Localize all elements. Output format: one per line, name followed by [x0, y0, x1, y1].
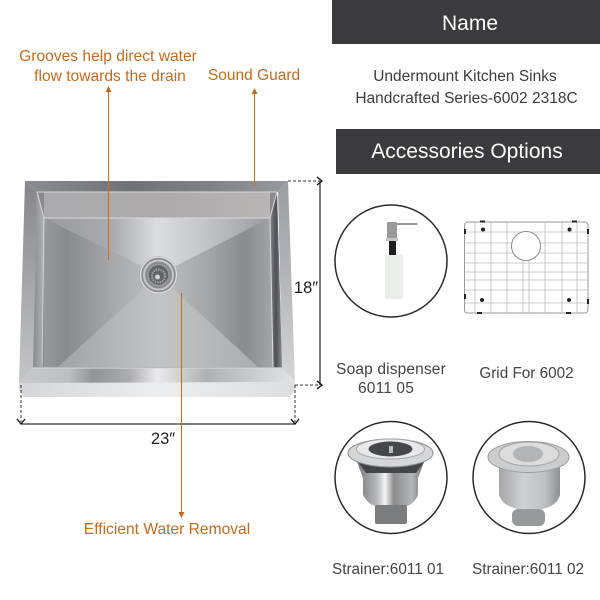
sink basin [33, 192, 282, 368]
accessory: strainer 02: Strainer:6011 02 [472, 561, 584, 578]
product name text: Undermount Kitchen Sinks [373, 68, 557, 85]
dimension: 18 inch: 18″ [294, 279, 318, 297]
callout: sound guard: Sound Guard [208, 67, 300, 84]
icon: strainer 02 [473, 422, 586, 534]
icon: strainer 01 [335, 422, 448, 534]
header: Name: Name [442, 12, 498, 35]
dimension: 23 inch [17, 385, 299, 448]
callout: sound guard [208, 67, 300, 186]
product name text [355, 68, 578, 107]
drain strainer [140, 256, 178, 294]
accessory: soap dispenser: 6011 05 [358, 380, 414, 397]
callout: grooves: flow towards the drain [34, 68, 186, 85]
dimension: 18 inch [288, 177, 322, 389]
header: Accessories Options: Accessories Options [371, 140, 563, 163]
dimension: 23 inch: 23″ [151, 430, 175, 448]
sink front face [19, 382, 295, 397]
callout: grooves: Grooves help direct water [19, 48, 197, 65]
accessory: soap dispenser: Soap dispenser [336, 361, 446, 378]
sink flange [19, 181, 295, 383]
callout: efficient water removal [84, 293, 250, 538]
accessory: grid [464, 220, 589, 382]
product name text: Handcrafted Series-6002 2318C [355, 90, 578, 107]
accessory: soap dispenser [335, 205, 448, 397]
accessory: strainer 01 [332, 422, 448, 578]
icon: sink grid [464, 220, 589, 314]
callout: grooves [19, 48, 197, 260]
accessory: grid: Grid For 6002 [479, 365, 574, 382]
header: Accessories Options [336, 129, 600, 174]
header: Name [332, 0, 600, 44]
accessory: strainer 02 [472, 422, 586, 578]
accessory: strainer 01: Strainer:6011 01 [332, 561, 444, 578]
sink illustration [19, 181, 295, 397]
callout: efficient water removal: Efficient Water Removal [84, 521, 250, 538]
icon: soap dispenser [335, 205, 448, 318]
